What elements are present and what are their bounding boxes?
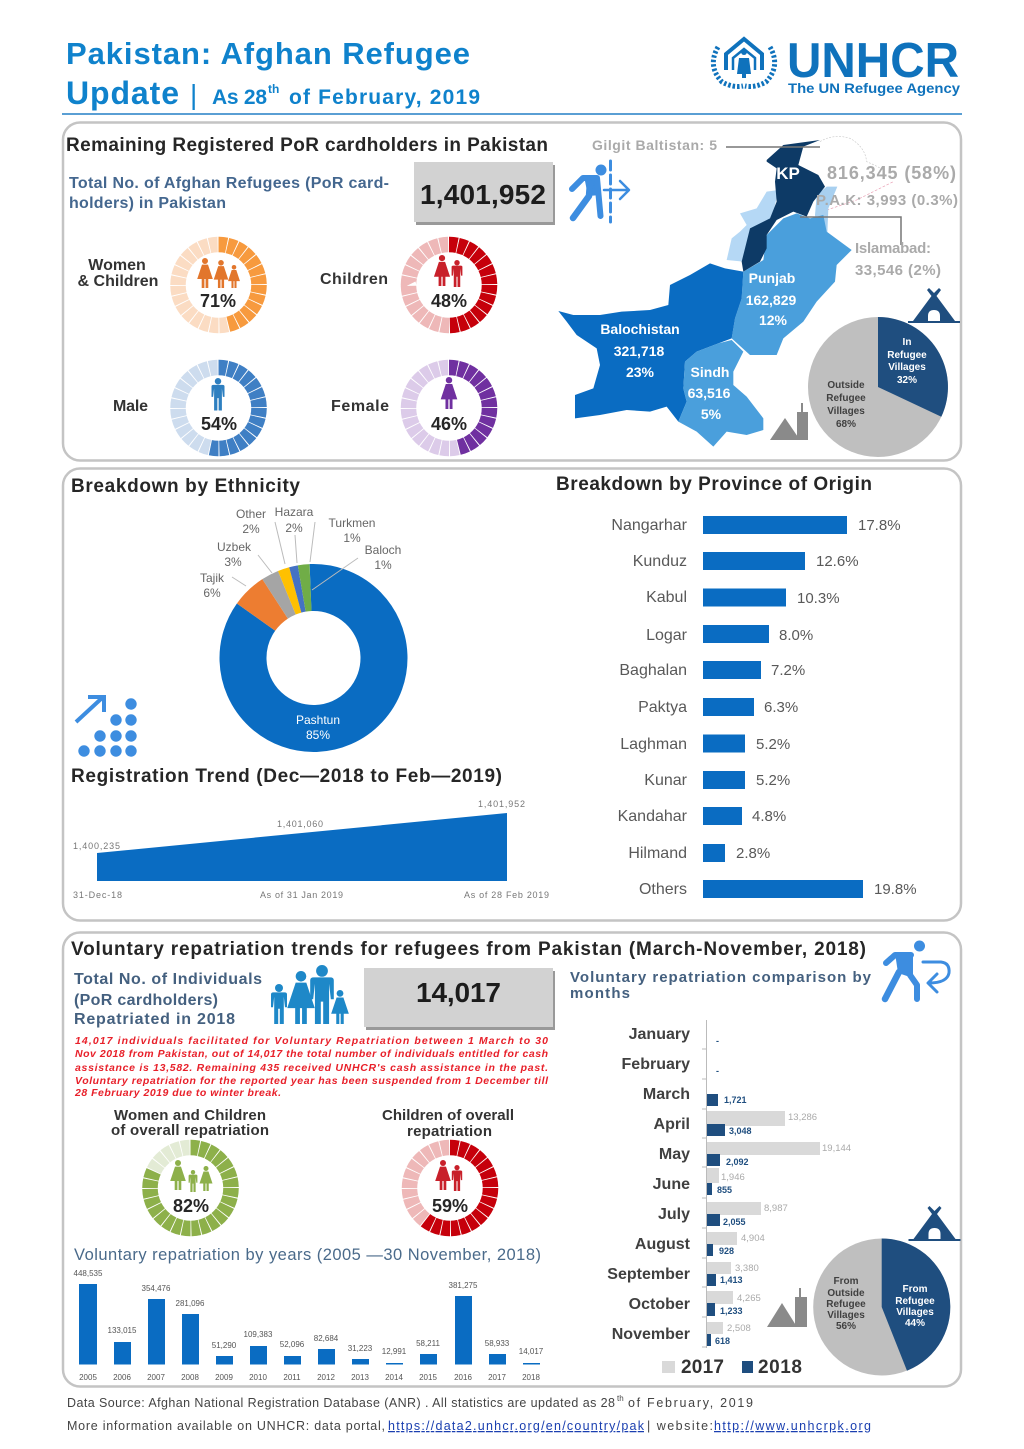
chart: children ring: 48%: [431, 291, 467, 311]
bar chart: repatriation by years: 58,211: [416, 1339, 440, 1348]
pie: refugee villages: Refugee: [826, 393, 866, 404]
bar chart: monthly comparison: April: [654, 1116, 690, 1133]
bar chart: province of origin: 8.0%: [779, 627, 813, 644]
text block: red note: assistance is 13,582. Remaining 435 received UNHCR's cash assistance in the past.: [75, 1062, 548, 1074]
map labels: [592, 137, 958, 422]
pie: refugee villages: Villages: [827, 406, 865, 417]
bar chart: repatriation by years: 133,015: [108, 1326, 137, 1335]
icon: tent: [908, 1206, 960, 1241]
bar chart: monthly comparison: February: [622, 1056, 690, 1073]
title: of February, 2019: [289, 86, 480, 109]
text block: more information: | website:: [647, 1419, 713, 1433]
icon: family: [271, 965, 349, 1024]
bar chart: province of origin: 5.2%: [756, 736, 790, 753]
label: women and children: Women: [88, 257, 146, 274]
label: female: Female: [331, 398, 389, 415]
bar chart: monthly comparison: September: [607, 1266, 690, 1283]
map labels: 12%: [759, 312, 788, 328]
pie: refugee villages: In: [903, 337, 911, 348]
bar chart: repatriation by years: 51,290: [212, 1341, 237, 1350]
text block: more information: https://data2.unhcr.org/en/country/pak: [388, 1419, 645, 1433]
text block: red note: Voluntary repatriation for the reported year has been suspended from 1 December till: [75, 1075, 549, 1087]
heading: registration trend: Registration Trend (Dec—2018 to Feb—2019): [71, 766, 502, 787]
bar chart: monthly comparison: -: [716, 1066, 719, 1076]
icon: person crossing border: [572, 161, 629, 222]
text block: total label: (PoR cardholders): [74, 992, 218, 1009]
bar chart: monthly comparison: 13,286: [788, 1112, 817, 1123]
text block: red note: [74, 1035, 549, 1099]
text block: red note: 28 February 2019 due to winter break.: [74, 1087, 281, 1099]
heading: repatriation by years: Voluntary repatriation by years (2005 —30 November, 2018): [74, 1246, 541, 1264]
map labels: KP: [776, 164, 800, 183]
bar chart: monthly comparison: 2,508: [727, 1323, 751, 1334]
bar chart: repatriation by years: 109,383: [244, 1330, 273, 1339]
legend: 2018: [758, 1357, 802, 1378]
donut labels: Turkmen: [329, 516, 375, 530]
map labels: 33,546 (2%): [855, 262, 941, 279]
area chart: registration trend: As of 28 Feb 2019: [464, 890, 549, 900]
label: women and children: [78, 257, 158, 290]
heading: monthly comparison: Voluntary repatriation comparison by: [570, 969, 872, 986]
bar chart: province of origin: 4.8%: [752, 808, 786, 825]
pie: refugee villages: [808, 317, 948, 457]
bar chart: repatriation by years: 2009: [215, 1373, 233, 1382]
callout: total number: 1,401,952: [420, 179, 546, 210]
bar chart: monthly comparison: November: [612, 1326, 690, 1343]
bar chart: province of origin: 7.2%: [771, 662, 805, 679]
map leader lines: [726, 147, 901, 245]
bar chart: monthly comparison: 618: [715, 1336, 730, 1346]
bar chart: repatriation by years: 2016: [454, 1373, 472, 1382]
area chart: registration trend: 1,401,060: [277, 819, 323, 829]
map of Pakistan: [558, 136, 893, 447]
bar chart: repatriation by years: 2005: [79, 1373, 97, 1382]
bar chart: province of origin: 19.8%: [874, 881, 917, 898]
bar chart: province of origin: 12.6%: [816, 553, 859, 570]
icon: UNHCR logo: UNHCR: [787, 34, 959, 88]
pie: repatriation origin: Villages: [827, 1310, 865, 1321]
callout: total repatriated: [364, 968, 555, 1030]
legend: 2017: [681, 1357, 724, 1378]
callout: total repatriated: 14,017: [416, 977, 501, 1008]
bar chart: monthly comparison: 1,946: [721, 1172, 745, 1183]
text block: total label: Total No. of Individuals: [74, 971, 262, 988]
bar chart: monthly comparison: 855: [717, 1185, 732, 1195]
donut labels: 2%: [242, 522, 260, 536]
label: children of overall: repatriation: [407, 1123, 492, 1140]
bar chart: monthly comparison: 19,144: [822, 1143, 851, 1154]
bar chart: repatriation by years: 52,096: [280, 1340, 305, 1349]
donut labels: Tajik: [200, 571, 225, 585]
area chart: registration trend: 1,401,952: [478, 799, 525, 809]
icon: city: [770, 403, 808, 440]
icon: person returning: [885, 940, 949, 999]
bar chart: monthly comparison: August: [635, 1236, 691, 1253]
panel: voluntary repatriation: [63, 932, 961, 1386]
chart: male ring: [178, 368, 259, 448]
chart: female ring: [408, 368, 490, 448]
bar chart: repatriation by years: 2013: [351, 1373, 369, 1382]
heading: Remaining Registered PoR cardholders in Pakistan: [66, 135, 548, 156]
panel: remaining registered cardholders: [63, 122, 961, 460]
bar chart: repatriation by years: [74, 1269, 544, 1382]
bar chart: repatriation by years: 281,096: [176, 1299, 205, 1308]
heading: ethnicity: Breakdown by Ethnicity: [71, 476, 300, 497]
text block: data source: [67, 1394, 753, 1410]
bar chart: monthly comparison: 4,265: [737, 1293, 761, 1304]
text block: total label: [74, 971, 262, 1028]
map labels: 23%: [626, 364, 655, 380]
bar chart: province of origin: 6.3%: [764, 699, 798, 716]
pie: refugee villages: Villages: [888, 362, 926, 373]
bar chart: province of origin: Others: [639, 881, 687, 898]
text block: red note: Nov 2018 from Pakistan, out of 14,017 the total number of individuals entitled for cash: [75, 1048, 548, 1060]
icon: UNHCR logo: [713, 34, 960, 96]
bar chart: monthly comparison: 4,904: [741, 1233, 765, 1244]
bar chart: repatriation by years: 2006: [113, 1373, 131, 1382]
text block: red note: 14,017 individuals facilitated for Voluntary Repatriation between 1 March to 30: [75, 1035, 548, 1047]
donut chart: ethnicity: [241, 585, 386, 731]
map labels: Islamabad:: [855, 240, 931, 257]
heading: province of origin: Breakdown by Province of Origin: [556, 474, 872, 495]
bar chart: monthly comparison: October: [629, 1296, 690, 1313]
donut labels: 1%: [343, 531, 361, 545]
bar chart: repatriation by years: 2007: [147, 1373, 165, 1382]
pie: repatriation origin: Refugee: [895, 1296, 935, 1307]
chart: children repatriated ring: [410, 1148, 490, 1228]
bar chart: province of origin: Kandahar: [618, 808, 688, 825]
bar chart: monthly comparison: 3,048: [729, 1126, 752, 1136]
label: children of overall: [382, 1107, 514, 1140]
bar chart: repatriation by years: 2018: [522, 1373, 540, 1382]
map labels: Gilgit Baltistan: 5: [592, 137, 717, 153]
text block: more information: http://www.unhcrpk.org: [714, 1419, 871, 1433]
chart: women and children repatriated ring: 82%: [173, 1196, 209, 1216]
chart: female ring: 46%: [431, 414, 467, 434]
bar chart: monthly comparison: January: [629, 1026, 690, 1043]
bar chart: repatriation by years: 14,017: [519, 1347, 544, 1356]
bar chart: province of origin: 2.8%: [736, 845, 770, 862]
bar chart: province of origin: Logar: [646, 627, 688, 644]
bar chart: province of origin: Nangarhar: [611, 517, 688, 534]
panel: ethnicity, trend and origin: [63, 468, 961, 920]
bar chart: monthly comparison: 2,055: [723, 1217, 746, 1227]
label: male: Male: [113, 398, 148, 415]
donut labels: 1%: [374, 558, 392, 572]
bar chart: repatriation by years: 2014: [385, 1373, 403, 1382]
area chart: registration trend: 1,400,235: [73, 841, 120, 851]
bar chart: monthly comparison: July: [658, 1206, 690, 1223]
label: women and children of overall: Women and Children: [114, 1107, 266, 1124]
bar chart: province of origin: Paktya: [638, 699, 687, 716]
chart: children repatriated ring: 59%: [432, 1196, 468, 1216]
bar chart: repatriation by years: 2017: [488, 1373, 506, 1382]
title: th: [268, 82, 279, 96]
bar chart: repatriation by years: 381,275: [449, 1281, 478, 1290]
text block: data source: of February, 2019: [628, 1396, 753, 1410]
title: As 28: [212, 86, 267, 109]
bar chart: repatriation by years: 448,535: [74, 1269, 103, 1278]
title: Update: [66, 75, 179, 111]
bar chart: province of origin: Laghman: [620, 736, 687, 753]
bar chart: monthly comparison: May: [659, 1146, 690, 1163]
chart: women and children repatriated ring: [150, 1148, 231, 1228]
bar chart: province of origin: Baghalan: [619, 662, 687, 679]
donut labels: 3%: [224, 555, 242, 569]
heading: Voluntary repatriation trends for refugees from Pakistan (March-November, 2018): [71, 939, 866, 960]
pie: refugee villages: Outside: [827, 380, 865, 391]
icon: tent: [908, 288, 960, 323]
bar chart: monthly comparison: 2,092: [726, 1157, 749, 1167]
label: children: Children: [320, 271, 388, 288]
area chart: registration trend: 31-Dec-18: [73, 890, 122, 900]
pie: repatriation origin: [813, 1238, 950, 1376]
donut labels: 6%: [203, 586, 221, 600]
bar chart: monthly comparison: -: [716, 1036, 719, 1046]
donut labels: [200, 505, 401, 742]
legend: [662, 1357, 802, 1378]
pie: repatriation origin: Villages: [896, 1307, 934, 1318]
bar chart: repatriation by years: 31,223: [348, 1344, 373, 1353]
bar chart: province of origin: [611, 516, 917, 898]
chart: women and children ring: 71%: [200, 291, 236, 311]
donut labels: 85%: [306, 728, 330, 742]
bar chart: province of origin: Kunduz: [633, 553, 687, 570]
pie: refugee villages: 68%: [836, 419, 856, 430]
text block: total label: [69, 175, 389, 212]
bar chart: monthly comparison: 1,233: [720, 1306, 743, 1316]
bar chart: repatriation by years: 58,933: [485, 1339, 510, 1348]
pie: repatriation origin: Outside: [827, 1288, 865, 1299]
map labels: 321,718: [614, 343, 665, 359]
pie: repatriation origin: From: [902, 1284, 928, 1295]
callout: total number: [414, 162, 555, 225]
bar chart: repatriation by years: 2010: [249, 1373, 267, 1382]
bar chart: province of origin: Hilmand: [628, 845, 687, 862]
bar chart: province of origin: Kunar: [644, 772, 688, 789]
pie: repatriation origin: Refugee: [826, 1299, 866, 1310]
map labels: P.A.K: 3,993 (0.3%): [816, 192, 958, 209]
heading: monthly comparison: months: [570, 985, 630, 1002]
heading: monthly comparison: [570, 969, 872, 1002]
chart: children ring: [408, 244, 490, 326]
label: women and children of overall: [111, 1107, 269, 1139]
icon: UNHCR logo: The UN Refugee Agency: [788, 80, 960, 96]
donut labels: Hazara: [275, 505, 314, 519]
label: children of overall: Children of overall: [382, 1107, 514, 1124]
text block: total label: holders) in Pakistan: [69, 195, 226, 212]
donut labels: Other: [236, 507, 266, 521]
text block: data source: Data Source: Afghan National Registration Database (ANR) . All statistics are updated as 28: [67, 1396, 615, 1410]
bar chart: province of origin: Kabul: [646, 589, 687, 606]
bar chart: monthly comparison: 1,721: [724, 1095, 747, 1105]
text block: total label: Total No. of Afghan Refugees (PoR card-: [69, 175, 389, 192]
bar chart: monthly comparison: 3,380: [735, 1263, 759, 1274]
bar chart: monthly comparison: 928: [719, 1246, 734, 1256]
bar chart: repatriation by years: 2015: [419, 1373, 437, 1382]
bar chart: repatriation by years: 12,991: [382, 1347, 407, 1356]
bar chart: monthly comparison: 1,413: [720, 1275, 743, 1285]
bar chart: repatriation by years: 2008: [181, 1373, 199, 1382]
area chart: registration trend: As of 31 Jan 2019: [260, 890, 343, 900]
bar chart: repatriation by years: 2011: [283, 1373, 301, 1382]
chart: women and children ring: [178, 244, 259, 326]
title: Pakistan: Afghan Refugee: [66, 36, 470, 71]
chart: male ring: 54%: [201, 414, 237, 434]
bar chart: province of origin: 17.8%: [858, 517, 901, 534]
map labels: Punjab: [749, 270, 795, 286]
pie: repatriation origin: From: [834, 1276, 859, 1287]
title: [66, 36, 480, 111]
map labels: Balochistan: [600, 321, 680, 337]
donut labels: Baloch: [365, 543, 401, 557]
donut labels: Pashtun: [296, 713, 340, 727]
bar chart: province of origin: 5.2%: [756, 772, 790, 789]
pie: refugee villages: 32%: [897, 375, 917, 386]
bar chart: repatriation by years: 354,476: [142, 1284, 171, 1293]
area chart: registration trend: [73, 799, 549, 900]
icon: city: [767, 1288, 807, 1327]
text block: more information: [67, 1419, 871, 1433]
bar chart: monthly comparison: [607, 1020, 851, 1348]
label: women and children: & Children: [78, 273, 158, 290]
donut labels: 2%: [285, 521, 303, 535]
bar chart: repatriation by years: 2012: [317, 1373, 335, 1382]
pie: repatriation origin: 44%: [905, 1318, 925, 1329]
text block: total label: Repatriated in 2018: [74, 1011, 235, 1028]
map labels: 162,829: [746, 292, 797, 308]
map labels: Sindh: [691, 364, 729, 380]
bar chart: repatriation by years: 82,684: [314, 1334, 339, 1343]
title: |: [190, 79, 197, 110]
text block: more information: More information available on UNHCR: data portal,: [67, 1419, 385, 1433]
bar chart: province of origin: 10.3%: [797, 590, 840, 607]
bar chart: monthly comparison: June: [653, 1176, 690, 1193]
map labels: 5%: [701, 406, 722, 422]
icon: rising dots: [76, 697, 137, 757]
pie: refugee villages: Refugee: [887, 350, 927, 361]
bar chart: monthly comparison: March: [643, 1086, 690, 1103]
pie: repatriation origin: 56%: [836, 1321, 856, 1332]
donut labels: Uzbek: [217, 540, 252, 554]
bar chart: monthly comparison: 8,987: [764, 1203, 788, 1214]
map labels: 816,345 (58%): [827, 163, 956, 183]
label: women and children of overall: of overall repatriation: [111, 1122, 269, 1139]
text block: data source: th: [617, 1394, 624, 1403]
map labels: 63,516: [688, 385, 731, 401]
